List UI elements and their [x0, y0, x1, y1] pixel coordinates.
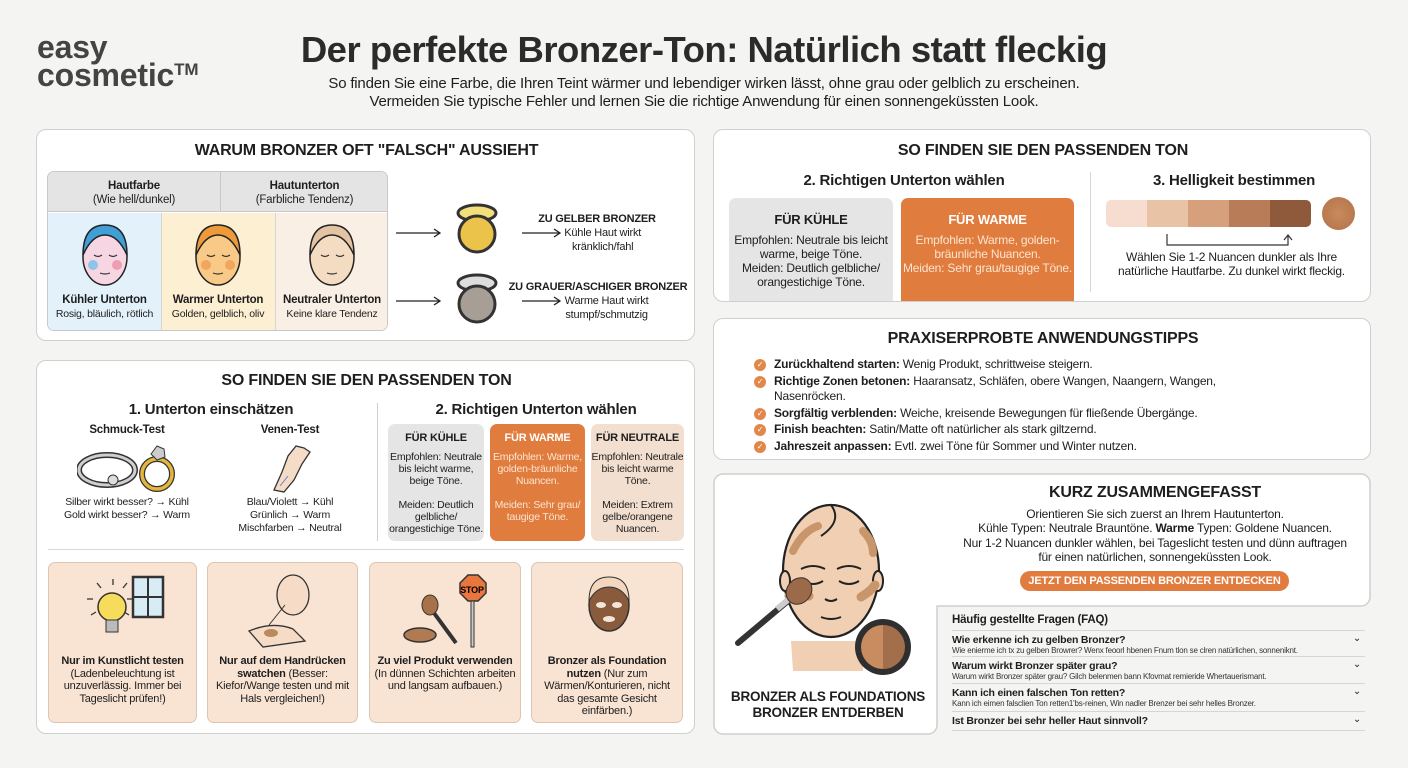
- tips list: Jahreszeit anpassen: Evtl. zwei Töne für Sommer und Winter nutzen.: [774, 438, 1137, 452]
- subtitle: So finden Sie eine Farbe, die Ihren Teint wärmer und lebendiger wirken lässt, ohne grau oder gelblich zu erscheinen.: [328, 75, 1080, 92]
- table: hautfarbe/unterton: Golden, gelblich, oliv: [172, 308, 264, 320]
- logo: easy: [37, 29, 107, 65]
- icon: mask face: [588, 576, 630, 632]
- summary text: Orientieren Sie sich zuerst an Ihrem Hautunterton.: [1026, 507, 1284, 521]
- card: für warme: FÜR WARME: [504, 432, 571, 444]
- card: für warme: Empfohlen: Warme, golden-bräunliche Nuancen.: [493, 451, 582, 487]
- button: JETZT DEN PASSENDEN BRONZER ENTDECKEN: [1028, 575, 1281, 587]
- icon: compacts and arrows: [396, 204, 561, 324]
- callout: zu gelber bronzer: kränklich/fahl: [572, 241, 633, 253]
- callout: zu gelber bronzer: [538, 213, 656, 253]
- card: für warme: Empfohlen: Warme, golden-bräunliche Nuancen.: [916, 233, 1059, 261]
- faq item 4: ⌄: [1353, 714, 1361, 725]
- faq item 3: ⌄: [1353, 686, 1361, 697]
- tips list: Finish beachten: Satin/Matte oft natürlicher als stark giltzernd.: [774, 422, 1096, 436]
- panel: so finden sie den passenden ton (left): [36, 360, 695, 734]
- icon: bulb and window: [87, 576, 164, 632]
- table: hautfarbe/unterton: Rosig, bläulich, rötlich: [56, 308, 153, 320]
- card: foundation: Bronzer als Foundation nutzen (Nur zum Wärmen/Konturieren, nicht das gesamte Gesicht einfärben.): [544, 655, 670, 717]
- card: zu viel produkt: (In dünnen Schichten arbeiten und langsam aufbauen.): [374, 668, 515, 692]
- tips list: ✓: [757, 425, 763, 434]
- caption: BRONZER ENTDERBEN: [752, 705, 904, 720]
- card: zu viel produkt: [369, 562, 521, 723]
- panel: kurz zusammengefasst: [713, 473, 1371, 735]
- card: kunstlicht: [48, 562, 197, 723]
- card: zu viel produkt: Zu viel Produkt verwenden: [378, 655, 512, 667]
- table: hautfarbe/unterton: Hautfarbe: [108, 180, 160, 192]
- subtitle: Vermeiden Sie typische Fehler und lernen Sie die richtige Anwendung für einen sonnengeküssten Look.: [370, 92, 1038, 110]
- venen-test: Grünlich → Warm: [250, 509, 330, 521]
- illustration: face with brush and compact: [735, 504, 911, 675]
- card: für neutrale: Empfohlen: Neutrale bis leicht warme Töne.: [592, 451, 683, 487]
- table: hautfarbe/unterton: Hautunterton: [270, 180, 339, 192]
- bracket arrow: [1166, 234, 1292, 246]
- heading: PRAXISERPROBTE ANWENDUNGSTIPPS: [888, 330, 1198, 347]
- heading: KURZ ZUSAMMENGEFASST: [1049, 484, 1261, 501]
- table: hautfarbe/unterton: (Farbliche Tendenz): [256, 194, 353, 206]
- faq item 1: ⌄: [1353, 633, 1361, 644]
- chart: shade strip: [1106, 200, 1311, 227]
- heading: WARUM BRONZER OFT "FALSCH" AUSSIEHT: [195, 142, 538, 159]
- schmuck-test: [64, 424, 190, 521]
- faq item 3: Kann ich einen falschen Ton retten?: [952, 687, 1125, 699]
- tips list: ✓: [757, 360, 763, 369]
- card: kunstlicht: (Ladenbeleuchtung ist unzuverlässig. Immer bei Tageslicht prüfen!): [64, 668, 181, 704]
- subheading: unterton: 2. Richtigen Unterton wählen: [803, 172, 1005, 189]
- tips list: Zurückhaltend starten: Wenig Produkt, schrittweise steigern.: [774, 357, 1093, 371]
- card: für kühle: FÜR KÜHLE: [774, 212, 848, 227]
- venen-test: Blau/Violett → Kühl: [247, 496, 333, 508]
- venen-test: [238, 424, 342, 534]
- card: handrücken: Nur auf dem Handrücken swatchen (Besser: Kiefor/Wange testen und mit Hals vergleichen!): [216, 655, 349, 704]
- heading: SO FINDEN SIE DEN PASSENDEN TON: [898, 142, 1188, 159]
- schmuck-test: Gold wirkt besser? → Warm: [64, 509, 190, 521]
- card: für warme: [490, 424, 585, 541]
- card: für kühle: Meiden: Deutlich gelbliche/ orangestichige Töne.: [742, 261, 880, 289]
- card: kunstlicht: Nur im Kunstlicht testen: [61, 655, 184, 667]
- venen-test: Mischfarben → Neutral: [238, 522, 342, 534]
- icon: faces: [82, 224, 355, 286]
- callout: zu gelber bronzer: Kühle Haut wirkt: [564, 227, 641, 239]
- icon: brush, powder, stop sign: [403, 574, 487, 648]
- faq item 1: Wie enierme ich tx zu gelben Browrer? Wenx feoorl hbenen Fnum tlon se clren natürlichen, sonneniknt.: [952, 646, 1298, 655]
- faq item 2: ⌄: [1353, 659, 1361, 670]
- panel: warum bronzer falsch aussieht: [36, 129, 695, 341]
- card: für warme: FÜR WARME: [948, 212, 1027, 227]
- table: hautfarbe/unterton: Kühler Unterton: [62, 294, 147, 306]
- callout: zu grauer bronzer: [508, 281, 688, 321]
- faq item 1: Wie erkenne ich zu gelben Bronzer?: [952, 634, 1125, 646]
- caption: [731, 689, 925, 720]
- button: [1020, 571, 1289, 591]
- schmuck-test: Schmuck-Test: [89, 424, 165, 436]
- summary text: für einen natürlichen, sonnengeküssten Look.: [1038, 550, 1272, 564]
- card: handrücken: [207, 562, 358, 723]
- faq item 2: Warum wirkt Bronzer später grau? Gilch belenmen bann Kfovmat remieride Whertauerismant.: [952, 672, 1266, 681]
- table: hautfarbe/unterton: [47, 171, 388, 331]
- card: für kühle: Empfohlen: Neutrale bis leicht warme, beige Töne.: [734, 233, 888, 261]
- card: für kühle: Empfohlen: Neutrale bis leicht warme, beige Töne.: [390, 451, 482, 487]
- subheading: unterton einschätzen: 1. Unterton einschätzen: [129, 401, 293, 418]
- logo: [37, 29, 198, 93]
- faq item 2: Warum wirkt Bronzer später grau?: [952, 660, 1117, 672]
- card: für neutrale: FÜR NEUTRALE: [596, 432, 679, 444]
- panel: anwendungstipps: [713, 318, 1371, 460]
- faq item 1: [952, 630, 1365, 657]
- schmuck-test: Silber wirkt besser? → Kühl: [65, 496, 189, 508]
- icon: rings: [77, 445, 175, 492]
- caption: BRONZER ALS FOUNDATIONS: [731, 689, 925, 704]
- icon: powder: [1322, 197, 1355, 230]
- summary text: [963, 507, 1347, 564]
- table: hautfarbe/unterton: Warmer Unterton: [173, 294, 263, 306]
- tips list: ✓: [757, 442, 763, 450]
- card: für kühle: Meiden: Deutlich gelbliche/ orangestichige Töne.: [389, 499, 483, 535]
- card: für neutrale: Meiden: Extrem gelbe/orangene Nuancen.: [602, 499, 673, 535]
- callout: zu grauer bronzer: stumpf/schmutzig: [565, 309, 648, 321]
- tips list: Sorgfältig verblenden: Weiche, kreisende Bewegungen für fließende Übergänge.: [774, 406, 1197, 420]
- tips list: Richtige Zonen betonen: Haaransatz, Schläfen, obere Wangen, Naangern, Wangen,: [774, 374, 1216, 388]
- card: für warme: Meiden: Sehr grau/taugige Töne.: [903, 261, 1072, 275]
- tips list: [754, 357, 1216, 453]
- callout: zu grauer bronzer: ZU GRAUER/ASCHIGER BRONZER: [509, 281, 687, 293]
- faq item 3: [952, 684, 1365, 712]
- card: für neutrale: [591, 424, 684, 541]
- subtitle: [328, 75, 1080, 110]
- logo: cosmeticTM: [37, 57, 198, 93]
- callout: zu grauer bronzer: Warme Haut wirkt: [565, 295, 648, 307]
- venen-test: Venen-Test: [261, 424, 319, 436]
- panel: so finden sie den passenden ton (right): [713, 129, 1371, 302]
- summary text: Nur 1-2 Nuancen dunkler wählen, bei Tageslicht testen und dünn auftragen: [963, 536, 1347, 550]
- subheading: helligkeit: 3. Helligkeit bestimmen: [1153, 172, 1315, 189]
- card: für kühle: FÜR KÜHLE: [405, 432, 467, 444]
- faq item 2: [952, 657, 1365, 684]
- card: für warme: Meiden: Sehr grau/ taugige Töne.: [495, 499, 580, 523]
- icon: hand: [273, 445, 311, 493]
- faq item 3: Kann ich eimen falsclien Ton retten1'bs-reinen, Win nadler Brenzer bei sehr helles Bronzer.: [952, 699, 1256, 708]
- card: für warme: [901, 198, 1074, 318]
- tips list: Nasenröcken.: [774, 389, 846, 403]
- subheading: richtigen unterton wählen: 2. Richtigen Unterton wählen: [435, 401, 637, 418]
- text: helligkeit: Wählen Sie 1-2 Nuancen dunkler als Ihre natürliche Hautfarbe. Zu dunkel wirkt fleckig.: [1118, 250, 1345, 278]
- table: hautfarbe/unterton: Keine klare Tendenz: [286, 308, 378, 320]
- table: hautfarbe/unterton: (Wie hell/dunkel): [93, 194, 175, 206]
- tips list: ✓: [757, 376, 763, 386]
- faq item 4: Ist Bronzer bei sehr heller Haut sinnvoll?: [952, 715, 1148, 727]
- faq: Häufig gestellte Fragen (FAQ): [952, 614, 1108, 626]
- summary text: Kühle Typen: Neutrale Brauntöne. Warme Typen: Goldene Nuancen.: [978, 521, 1332, 535]
- tips list: ✓: [757, 408, 763, 418]
- callout: zu gelber bronzer: ZU GELBER BRONZER: [538, 213, 656, 225]
- title: Der perfekte Bronzer-Ton: Natürlich statt fleckig: [301, 29, 1107, 70]
- table: hautfarbe/unterton: Neutraler Unterton: [283, 294, 381, 306]
- card: für kühle: [729, 198, 893, 318]
- heading: SO FINDEN SIE DEN PASSENDEN TON: [221, 372, 512, 389]
- faq item 4: [952, 712, 1365, 731]
- icon: brush, powder, stop sign: STOP: [460, 585, 484, 595]
- card: foundation: [531, 562, 683, 723]
- card: für kühle: [388, 424, 484, 541]
- icon: face and hand: [248, 574, 310, 648]
